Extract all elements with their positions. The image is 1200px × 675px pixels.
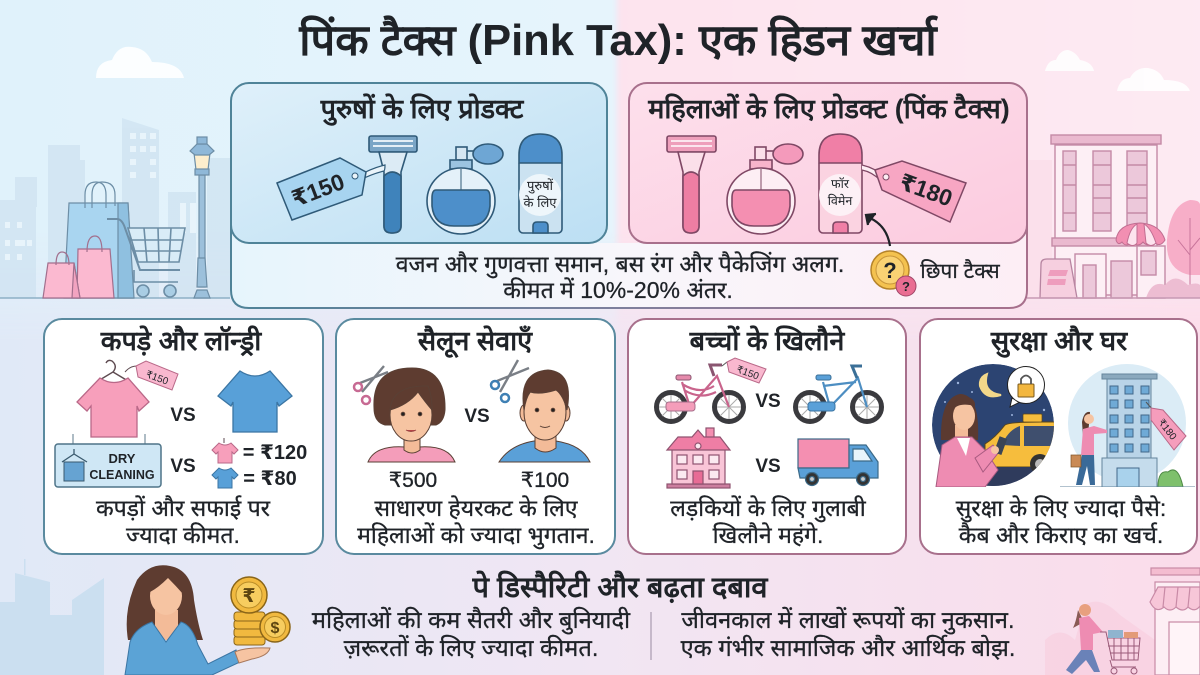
background scene: bottom right shopper and store xyxy=(1045,568,1200,675)
icon: blue shopping bag xyxy=(64,182,134,298)
legend: laundry prices: = ₹120 xyxy=(243,442,307,464)
icon: price tag 180 xyxy=(862,161,966,222)
icon: price tag 150 xyxy=(277,158,385,220)
icon: dry cleaning sign xyxy=(55,434,161,487)
icon: striped awning xyxy=(1116,223,1165,246)
icon: store front xyxy=(1150,568,1200,675)
icon: man portrait xyxy=(499,370,590,462)
panel: safety and home xyxy=(920,319,1197,554)
icon: pink t-shirt xyxy=(77,360,149,437)
icon: dollar coin: $ xyxy=(271,620,280,637)
heading: salon: सैलून सेवाएँ xyxy=(417,325,533,359)
decorative clouds xyxy=(96,47,1190,91)
panel: clothes and laundry xyxy=(44,319,323,554)
icon: dollar coin xyxy=(260,612,290,642)
heading: pay disparity: पे डिस्पैरिटी और बढ़ता दबाव xyxy=(471,570,769,604)
icon: shopping cart xyxy=(107,219,185,297)
icon: sidewalk sign xyxy=(1040,259,1077,298)
icon: small price tag 150 xyxy=(125,361,178,390)
icon: pink roll-on xyxy=(819,134,862,233)
icon: toy truck xyxy=(798,439,878,486)
icon: small tag 180 on building xyxy=(1146,402,1186,450)
icon: pink doll house xyxy=(667,428,730,488)
icon: shopper with cart xyxy=(1066,604,1103,674)
text: hidden tax label: छिपा टैक्स xyxy=(920,259,1001,283)
icon: hidden tax coin: ? xyxy=(883,258,897,283)
panel: salon services xyxy=(336,319,615,554)
text: clothes caption line two: ज्यादा कीमत. xyxy=(126,522,240,548)
label: vs: VS xyxy=(170,456,196,477)
icon: blue razor xyxy=(369,136,417,233)
illustration: city apartment xyxy=(1060,364,1195,487)
text: same quality note: वजन और गुणवत्ता समान, बस रंग और पैकेजिंग अलग. xyxy=(396,251,844,279)
legend: laundry prices: = ₹80 xyxy=(243,468,297,490)
icon: dry cleaning sign: DRY xyxy=(109,451,136,466)
icon: pink shopping bags xyxy=(43,236,114,298)
icon: pink roll-on: फॉर xyxy=(831,177,850,191)
price: men's haircut: ₹100 xyxy=(521,469,569,492)
icon: pink scissors xyxy=(354,366,388,404)
panel: men's products xyxy=(231,83,607,243)
icon: small tag 180 on building: ₹180 xyxy=(1155,417,1179,443)
heading: toys: बच्चों के खिलौने xyxy=(689,325,845,356)
heading: safety: सुरक्षा और घर xyxy=(990,325,1128,358)
icon: pink perfume xyxy=(727,144,803,234)
text: salon caption line two: महिलाओं को ज्यादा भुगतान. xyxy=(357,522,595,550)
icon: blue roll-on xyxy=(519,134,562,233)
icon: blue roll-on: पुरुषों xyxy=(527,178,554,194)
text: safety caption line two: कैब और किराए का खर्च. xyxy=(959,522,1163,548)
label: vs: VS xyxy=(755,456,781,477)
icon: pink roll-on: विमेन xyxy=(828,193,853,208)
background scene: bottom left skyline xyxy=(0,559,104,675)
illustration: night sky and taxi xyxy=(932,364,1060,487)
text: toys caption line two: खिलौने महंगे. xyxy=(713,522,823,548)
icon: small woman walking xyxy=(1071,412,1107,485)
text: toys caption: लड़कियों के लिए गुलाबी xyxy=(670,495,867,523)
icon: pink razor xyxy=(667,136,716,233)
icon: small price tag 150: ₹150 xyxy=(144,369,170,388)
text: lower salary note: महिलाओं की कम सैतरी और बुनियादी xyxy=(312,606,631,635)
label: vs: VS xyxy=(755,391,781,412)
icon: coin stack xyxy=(234,612,265,645)
icon: rupee coin: ₹ xyxy=(242,586,256,607)
icon: dry cleaning sign: CLEANING xyxy=(89,468,155,482)
icon: small tag 150 on bike: ₹150 xyxy=(735,364,761,383)
text: salon caption: साधारण हेयरकट के लिए xyxy=(375,495,579,521)
icon: blue scissors xyxy=(491,360,529,402)
icon: blue bike xyxy=(796,366,882,422)
illustration: woman booking taxi xyxy=(936,394,1007,487)
text: lifetime loss note: जीवनकाल में लाखों रूपयों का नुकसान. xyxy=(681,606,1015,635)
icon: rupee coin xyxy=(231,577,267,613)
label: vs: VS xyxy=(464,406,490,427)
icon: blue roll-on: के लिए xyxy=(524,195,557,210)
panel: children's toys xyxy=(628,319,906,554)
panel: price comparison details xyxy=(231,225,1027,308)
icon: hidden tax coin xyxy=(871,251,916,296)
text: safety caption: सुरक्षा के लिए ज्यादा पैसे: xyxy=(956,495,1166,523)
icon: pink tree xyxy=(1146,200,1200,298)
text: lower salary note line two: ज़रूरतों के लिए ज्यादा कीमत. xyxy=(344,634,598,662)
label: vs: VS xyxy=(170,405,196,426)
panel: women's products xyxy=(629,83,1027,243)
icon: woman portrait xyxy=(368,368,455,462)
heading: women's products: महिलाओं के लिए प्रोडक्ट (पिंक टैक्स) xyxy=(647,93,1010,124)
price: women's haircut: ₹500 xyxy=(389,469,437,492)
arrow: hidden tax points to roll-on xyxy=(866,214,890,246)
background scene: right pink shop building xyxy=(1027,135,1200,298)
icon: blue perfume xyxy=(427,144,503,234)
heading: men's products: पुरुषों के लिए प्रोडक्ट xyxy=(320,93,525,126)
icon: blue t-shirt xyxy=(218,371,292,432)
icon: street lamp xyxy=(190,137,214,298)
icon: price tag 150: ₹150 xyxy=(288,168,348,212)
divider xyxy=(650,612,652,660)
legend: laundry prices xyxy=(212,438,307,490)
text: clothes caption: कपड़ों और सफाई पर xyxy=(96,495,271,521)
illustration: woman with coins xyxy=(125,565,290,675)
icon: price tag 180: ₹180 xyxy=(896,168,956,212)
background scene: left city and shopping xyxy=(0,118,230,298)
heading: clothes: कपड़े और लॉन्ड्री xyxy=(100,325,262,357)
icon: hidden tax coin: ? xyxy=(902,279,910,294)
text: lifetime loss note line two: एक गंभीर सामाजिक और आर्थिक बोझ. xyxy=(681,634,1015,662)
title: पिंक टैक्स (Pink Tax): एक हिडन खर्चा xyxy=(298,15,939,65)
text: price difference: कीमत में 10%-20% अंतर. xyxy=(503,277,733,303)
icon: pink bike xyxy=(656,365,744,422)
icon: small tag 150 on bike xyxy=(722,358,766,383)
icon: lock speech bubble xyxy=(1008,366,1044,407)
